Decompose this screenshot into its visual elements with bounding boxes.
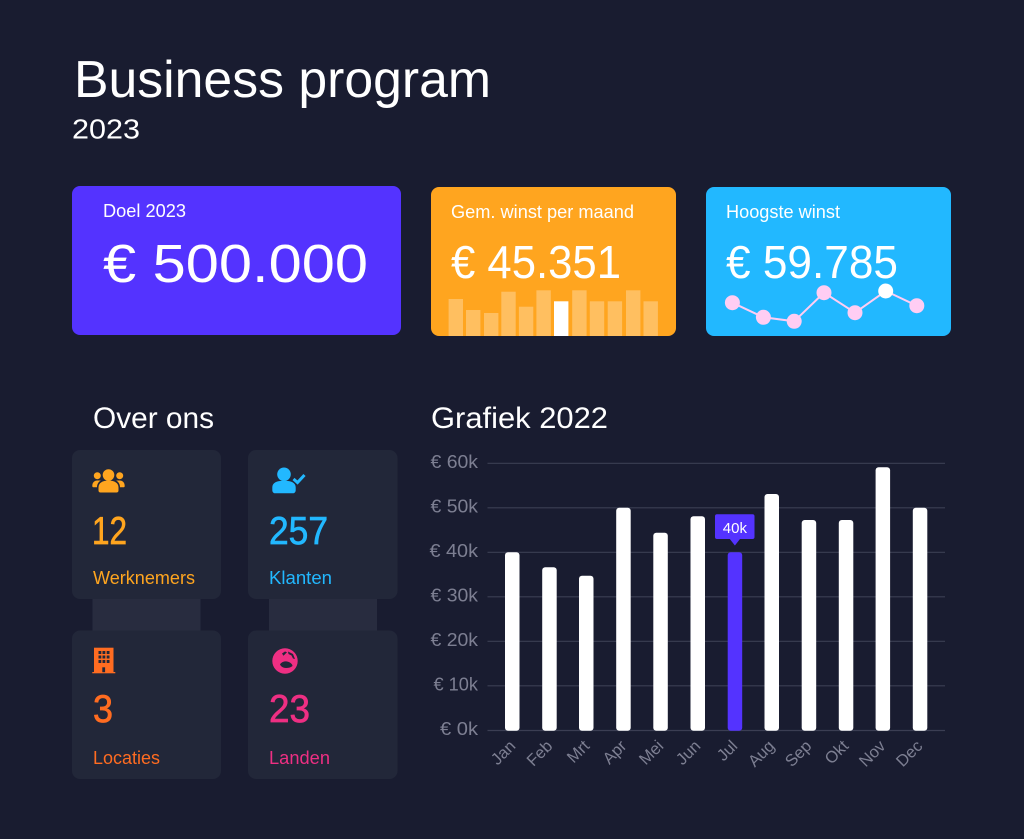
mini bar chart	[449, 290, 658, 336]
icon: globe	[272, 648, 298, 674]
panel: employees: 12	[92, 510, 127, 553]
icon: verified user	[272, 468, 304, 493]
tooltip: 40k	[715, 514, 754, 546]
panel: employees: Werknemers	[93, 568, 195, 588]
x axis labels: Mei	[636, 737, 667, 769]
x axis labels: Nov	[856, 737, 890, 771]
panel: average profit per month: Gem. winst per maand	[451, 202, 634, 222]
panel: average profit per month: € 45.351	[451, 236, 621, 288]
x axis labels: Okt	[821, 737, 853, 768]
panel: customers: Klanten	[269, 568, 332, 588]
y axis labels: € 0k	[440, 719, 479, 739]
panel: average profit per month	[431, 187, 676, 336]
y axis labels: € 30k	[430, 586, 479, 606]
panel: highest profit: € 59.785	[726, 236, 898, 288]
panel: customers	[248, 450, 398, 599]
panel: employees	[72, 450, 221, 599]
panel: locations: Locaties	[93, 748, 160, 768]
x axis labels: Feb	[523, 737, 556, 770]
mini line chart	[725, 284, 924, 329]
panel: highest profit	[706, 187, 951, 336]
x axis labels: Dec	[893, 737, 926, 771]
panel: goal 2023: Doel 2023	[103, 201, 186, 221]
panel: locations: 3	[93, 688, 113, 731]
x axis labels: Jul	[714, 737, 741, 765]
highlighted bar: July	[728, 552, 742, 731]
panel: locations	[72, 630, 221, 779]
panel: goal 2023	[72, 186, 401, 335]
panel: customers: 257	[269, 510, 328, 553]
heading: chart 2022: Grafiek 2022	[431, 402, 608, 435]
icon: team	[92, 469, 125, 492]
bars	[505, 467, 927, 731]
panel: countries: 23	[269, 688, 310, 731]
connector right	[269, 599, 377, 630]
bar chart: profit 2022	[430, 452, 945, 771]
connector left	[92, 599, 200, 630]
heading: about us: Over ons	[93, 402, 214, 435]
panel: highest profit: Hoogste winst	[726, 202, 840, 222]
y axis labels	[430, 452, 479, 739]
panel: goal 2023: € 500.000	[103, 234, 368, 294]
subtitle: year: 2023	[72, 114, 140, 144]
panel: countries	[248, 630, 398, 779]
y axis labels: € 60k	[430, 452, 479, 472]
x axis labels: Jun	[673, 737, 704, 769]
x axis labels: Mrt	[564, 737, 594, 767]
x axis labels: Apr	[599, 737, 631, 768]
panel: countries: Landen	[269, 748, 330, 768]
y axis labels: € 10k	[434, 675, 479, 695]
x axis labels: Sep	[782, 737, 815, 771]
y axis labels: € 40k	[430, 541, 479, 561]
x axis labels: Aug	[745, 737, 778, 771]
tooltip: 40k: 40k	[723, 520, 747, 537]
y axis labels: € 20k	[430, 630, 479, 650]
x axis labels: Jan	[488, 737, 519, 769]
x axis labels	[488, 737, 926, 771]
icon: building	[92, 648, 115, 673]
title: Business program	[74, 51, 491, 109]
y axis labels: € 50k	[430, 496, 479, 516]
